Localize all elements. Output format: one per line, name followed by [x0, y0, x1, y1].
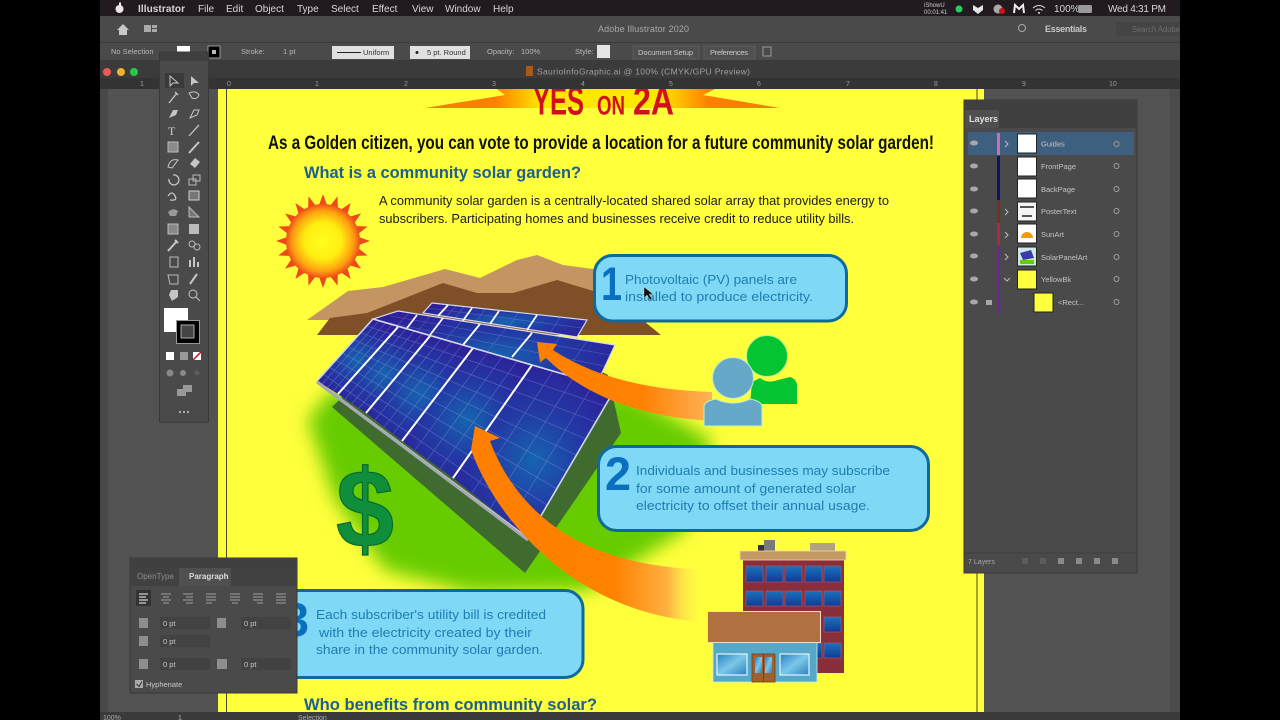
indent icons	[139, 618, 227, 669]
layer names: SunArt	[1041, 230, 1065, 239]
green person	[746, 336, 797, 404]
search field	[1116, 22, 1181, 36]
stroke profile: Uniform	[363, 48, 389, 57]
expand arrows	[1004, 141, 1010, 281]
ruler: 2	[404, 81, 408, 88]
alignment buttons	[136, 590, 286, 606]
menu items: Illustrator	[138, 4, 185, 15]
roof cap	[740, 551, 846, 560]
ruler: 1	[140, 81, 144, 88]
preferences button: Preferences	[710, 48, 748, 57]
callout 3: 3	[283, 593, 309, 646]
menu items: Help	[493, 4, 514, 15]
more tools	[179, 411, 189, 413]
arrow: panels to building	[471, 426, 702, 622]
banner: starburst with YES ON 2A	[425, 80, 780, 124]
control bar: Opacity:	[487, 47, 515, 56]
layer names	[1041, 140, 1088, 307]
layer names: Guides	[1041, 140, 1065, 148]
artboard: yellow poster	[218, 80, 984, 714]
icon: sun	[276, 194, 370, 288]
fill colour swatch	[164, 308, 188, 332]
application title: Adobe Illustrator 2020	[598, 24, 689, 34]
control bar: Style:	[575, 47, 594, 56]
heading: what is a community solar garden: What is a community solar garden?	[304, 163, 581, 182]
callout 2: 2	[605, 447, 631, 500]
ruler: 7	[846, 81, 850, 88]
solar panel array	[317, 303, 615, 540]
blue person	[704, 358, 762, 426]
ruler: 9	[1022, 81, 1026, 88]
thumbnail details	[1020, 207, 1034, 264]
tower windows	[746, 566, 841, 658]
layer names: YellowBk	[1041, 275, 1071, 284]
document setup button: Document Setup	[638, 48, 693, 57]
layer colour bars	[997, 133, 1000, 313]
application bar	[100, 16, 1181, 42]
store door	[752, 654, 775, 682]
bottom status bar	[100, 712, 1180, 720]
document title: SaurioInfoGraphic.ai @ 100% (CMYK/GPU Preview)	[537, 66, 750, 76]
headline: As a Golden citizen, you can vote to provide a location for a future community solar garden!	[268, 132, 934, 154]
intro text block	[379, 193, 889, 226]
preferences button	[704, 46, 755, 59]
callout 2: Individuals and businesses may subscribe	[636, 463, 890, 478]
ground shadow under solar array	[332, 350, 621, 573]
icon: two subscribers	[704, 336, 797, 426]
control bar	[100, 42, 1180, 60]
rooftop equipment	[758, 540, 835, 551]
panel: paragraph	[130, 558, 297, 693]
brick tower	[743, 559, 844, 673]
callout 1: 1	[601, 257, 622, 310]
icon: lightbulb	[1018, 24, 1026, 32]
status icons: iShowU	[924, 3, 945, 9]
status icons	[924, 3, 1166, 16]
tab: paragraph	[179, 568, 231, 586]
status icons: Wed 4:31 PM	[1108, 4, 1166, 15]
menu items: Select	[331, 4, 359, 15]
draw mode buttons	[166, 370, 200, 376]
indent fields	[160, 617, 291, 670]
search field: Search Adobe	[1132, 25, 1181, 34]
callout 3: Each subscriber's utility bill is credited	[316, 607, 546, 622]
indent fields: 0 pt	[244, 660, 257, 669]
layer thumbnails	[1018, 134, 1053, 312]
callout 1: installed to produce electricity.	[625, 289, 813, 304]
banner: starburst with YES ON 2A: ON	[597, 90, 625, 120]
callout 3	[262, 590, 583, 678]
layer names: BackPage	[1041, 185, 1075, 194]
layer names: <Rect...	[1058, 298, 1084, 307]
callout 2: for some amount of generated solar	[636, 481, 857, 496]
icon: home	[117, 24, 129, 35]
tab: layers: Layers	[969, 114, 998, 124]
callout 2	[598, 446, 928, 530]
intro text block: A community solar garden is a centrally-located shared solar array that provides energy to	[379, 193, 889, 208]
middle row of panels	[373, 311, 615, 392]
icon: building	[708, 540, 846, 682]
control bar: 100%	[521, 47, 541, 56]
store windows	[717, 654, 809, 675]
layer names: SolarPanelArt	[1041, 253, 1088, 262]
indent fields: 0 pt	[163, 619, 176, 628]
panel: tools	[160, 52, 208, 422]
callout 2: electricity to offset their annual usage.	[636, 498, 870, 513]
indent fields: 0 pt	[163, 660, 176, 669]
stroke swatch	[208, 46, 220, 58]
menu items: File	[198, 4, 215, 15]
control bar: 1 pt	[283, 47, 296, 56]
icon: dollar sign: $	[336, 448, 394, 571]
green ground	[308, 360, 712, 592]
back row of panels	[423, 303, 587, 337]
indent fields: 0 pt	[163, 637, 176, 646]
store wall	[713, 642, 817, 682]
screen mode button	[177, 385, 192, 396]
ruler: 10	[1109, 81, 1117, 88]
banner: starburst with YES ON 2A: YES	[533, 80, 584, 124]
canvas edge bars	[100, 78, 1180, 712]
ruler	[100, 78, 1180, 89]
cursor	[644, 287, 653, 300]
callout 1: Photovoltaic (PV) panels are	[625, 272, 797, 287]
stroke profile	[332, 46, 394, 59]
callout 3: with the electricity created by their	[318, 625, 533, 640]
icon: apple	[116, 2, 124, 13]
layers footer	[965, 553, 1136, 566]
control bar: No Selection	[111, 47, 154, 56]
menu items: Window	[445, 4, 481, 15]
heading: who benefits: Who benefits from community solar?	[304, 695, 597, 714]
status icons: 00:01:41	[924, 10, 948, 16]
ruler: 6	[757, 81, 761, 88]
menu items: Object	[255, 4, 284, 15]
store roof	[708, 612, 820, 642]
document tab bar	[100, 60, 1180, 78]
ruler: 0	[227, 81, 231, 88]
stroke colour swatch	[176, 320, 200, 344]
fill mode buttons	[166, 352, 201, 360]
workspace label: Essentials	[1045, 24, 1087, 34]
menu items: Type	[297, 4, 319, 15]
banner: starburst with YES ON 2A: 2A	[633, 80, 674, 124]
menu items	[138, 4, 514, 15]
callout 1	[594, 256, 846, 321]
layer names: PosterText	[1041, 207, 1077, 216]
selected row highlight	[968, 132, 1134, 155]
callout 3: share in the community solar garden.	[316, 642, 543, 657]
target circles	[1114, 142, 1119, 304]
window traffic lights	[103, 68, 138, 76]
document icon	[526, 66, 533, 76]
ruler: 8	[934, 81, 938, 88]
front row of panels	[317, 319, 615, 540]
ruler: 4	[581, 81, 585, 88]
macOS menu bar	[100, 0, 1180, 16]
brush definition	[410, 46, 470, 59]
intro text block: subscribers. Participating homes and businesses receive credit to reduce utility bills.	[379, 211, 854, 226]
indent fields: 0 pt	[244, 619, 257, 628]
control bar: Stroke:	[241, 47, 265, 56]
panel: layers	[964, 100, 1137, 573]
document setup button	[633, 46, 699, 59]
icon: workspace switcher	[144, 25, 157, 32]
arrange icon	[763, 47, 771, 56]
menu items: Edit	[226, 4, 243, 15]
ruler: 1	[315, 81, 319, 88]
menu items: Effect	[372, 4, 398, 15]
tab: layers	[965, 110, 999, 128]
hyphenate checkbox: Hyphenate	[146, 680, 182, 689]
menu items: View	[412, 4, 434, 15]
arrow: panels to subscribers	[537, 342, 712, 421]
mountains	[307, 255, 661, 335]
selection tool highlighted	[165, 73, 184, 88]
ruler: 3	[492, 81, 496, 88]
fill swatch	[177, 46, 190, 52]
ruler: 5	[669, 81, 673, 88]
tab: opentype: OpenType	[137, 572, 174, 581]
style swatch	[597, 45, 610, 58]
brush definition: 5 pt. Round	[427, 48, 466, 57]
status icons: 100%	[1054, 4, 1080, 15]
tool icons: T	[168, 124, 176, 138]
layer names: FrontPage	[1041, 162, 1076, 171]
tab: paragraph: Paragraph	[189, 572, 229, 581]
visibility icons	[970, 140, 992, 305]
layers footer: 7 Layers	[968, 559, 995, 566]
tool icons	[168, 76, 200, 301]
